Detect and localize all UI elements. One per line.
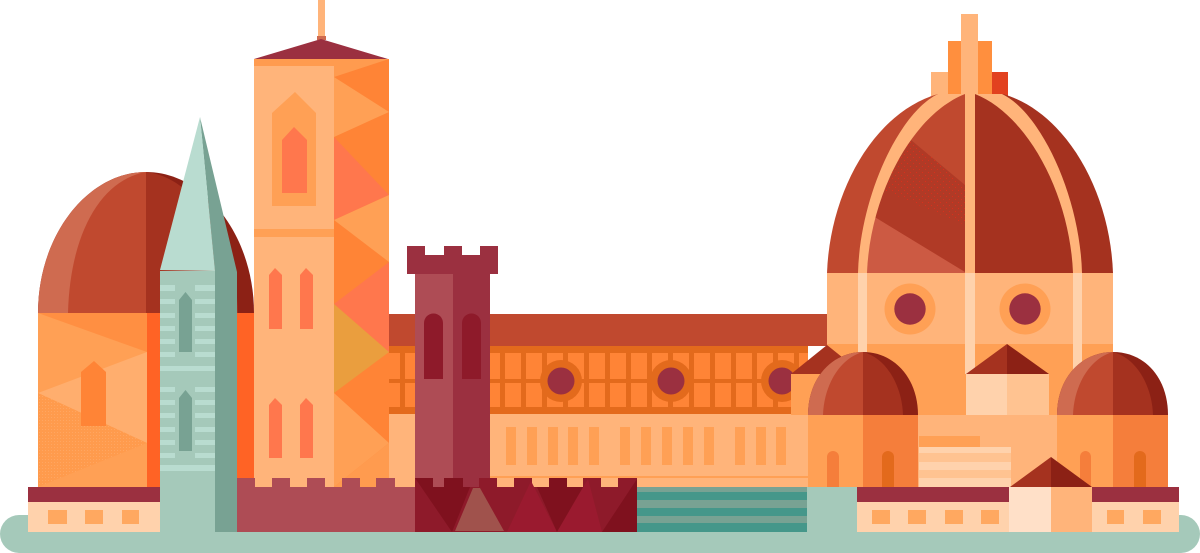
main dome ribs — [858, 94, 1082, 273]
spire shaft — [160, 271, 215, 532]
maroon tower — [407, 246, 498, 488]
central gable house — [966, 344, 1049, 415]
maroon crenellated wall — [415, 478, 637, 532]
nave lower windows — [506, 427, 786, 465]
left small chapel — [808, 352, 918, 487]
chapel dome — [808, 352, 918, 415]
tower paired windows — [269, 268, 313, 458]
ground — [0, 487, 1200, 553]
maroon tower body — [415, 274, 490, 488]
spire lit side — [160, 117, 215, 271]
maroon tower windows — [424, 314, 481, 379]
tower front face — [254, 59, 334, 487]
nave roof — [389, 314, 827, 346]
nave round windows — [540, 360, 803, 402]
far right low building — [1092, 487, 1179, 532]
right small chapel — [1057, 352, 1168, 487]
front gable house — [1009, 457, 1092, 532]
water canal — [637, 487, 807, 532]
nave frieze — [389, 346, 808, 414]
tower triangle side face — [334, 59, 389, 487]
tower upper window — [272, 92, 316, 206]
left dome — [38, 172, 254, 313]
lantern — [931, 14, 1008, 96]
long nave building — [389, 314, 827, 487]
left domed building — [38, 172, 254, 487]
nave lower wall — [389, 414, 808, 487]
main dome — [827, 94, 1113, 273]
left drum window — [81, 361, 106, 426]
left drum with triangles — [38, 313, 254, 487]
spire windows — [179, 292, 192, 451]
chapel dome — [1057, 352, 1168, 415]
cathedral lower wall — [808, 415, 1058, 487]
maroon tower battlements — [407, 246, 498, 274]
left low building — [28, 487, 160, 532]
brown gateway trapezoid — [455, 488, 504, 531]
main drum — [827, 273, 1113, 415]
tower pole — [317, 0, 326, 40]
crenellated pink wall — [237, 478, 415, 532]
tower roof — [254, 39, 388, 59]
chapel drum — [808, 415, 918, 487]
main cathedral — [791, 14, 1113, 487]
tall bell tower — [254, 0, 389, 487]
drum round windows — [884, 284, 1050, 334]
spire slats — [160, 285, 215, 471]
left gable house — [791, 345, 863, 415]
spire shaded side — [200, 117, 237, 532]
chapel drum — [1057, 415, 1168, 487]
green spire tower — [160, 117, 237, 532]
right low building — [857, 487, 1009, 532]
porch steps — [919, 436, 1011, 487]
main dome shaded panels — [867, 135, 965, 273]
